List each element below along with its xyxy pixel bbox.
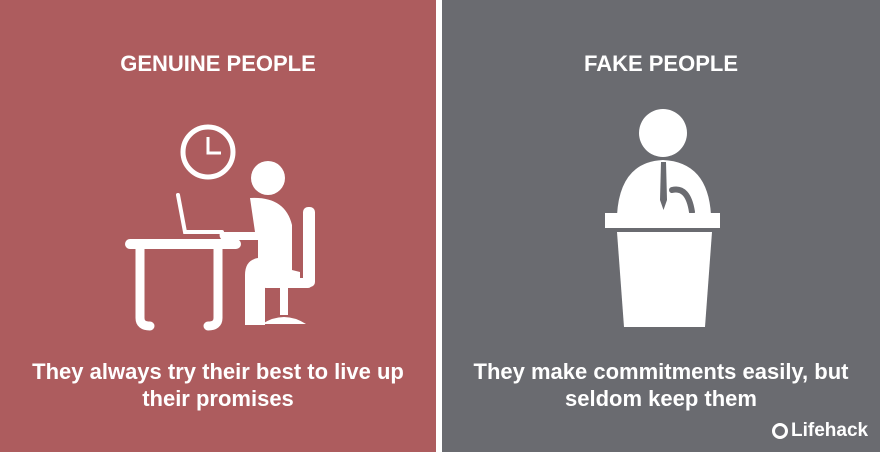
- logo: lifehack: Lifehack: [791, 420, 868, 441]
- caption: fake: They make commitments easily, but: [474, 359, 848, 384]
- heading: fake: FAKE PEOPLE: [584, 51, 738, 76]
- panel: genuine people: [0, 0, 436, 452]
- icon: speaker at podium: [605, 109, 720, 327]
- heading: genuine: GENUINE PEOPLE: [120, 51, 316, 76]
- icon: person at desk with clock: [125, 124, 315, 330]
- panel: fake people: [442, 0, 880, 452]
- caption: fake: seldom keep them: [565, 386, 757, 411]
- caption: genuine: [32, 359, 404, 411]
- caption: genuine: their promises: [142, 386, 294, 411]
- caption: genuine: They always try their best to live up: [32, 359, 404, 384]
- caption: fake: [474, 359, 848, 411]
